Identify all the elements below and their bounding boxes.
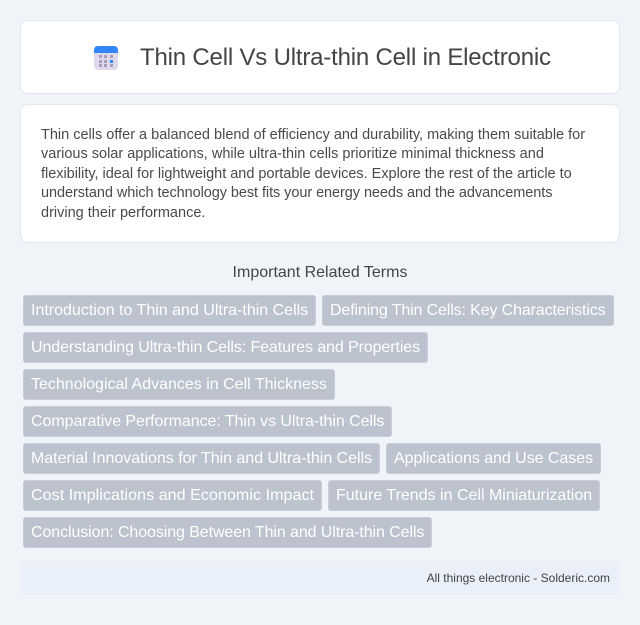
header card [20,20,620,94]
footer bar [20,561,620,595]
tag list: Cost Implications and Economic Impact [31,487,314,504]
intro text [41,127,585,221]
intro text: understand which technology best fits your energy needs and the advancements [41,185,552,201]
tag list: Introduction to Thin and Ultra-thin Cells [31,302,308,319]
tag list: Technological Advances in Cell Thickness [31,376,327,393]
intro text: Thin cells offer a balanced blend of efficiency and durability, making them suitable for [41,127,585,143]
intro text: various solar applications, while ultra-thin cells prioritize minimal thickness and [41,146,544,162]
tag list: Future Trends in Cell Miniaturization [336,487,592,504]
tag list: Material Innovations for Thin and Ultra-thin Cells [31,450,372,467]
tag list: Applications and Use Cases [394,450,593,467]
icon: calendar [94,46,118,70]
intro panel [20,104,620,243]
intro text: flexibility, ideal for lightweight and portable devices. Explore the rest of the article to [41,166,572,182]
tag list: Defining Thin Cells: Key Characteristics [330,302,606,319]
footer text: All things electronic - Solderic.com [427,571,610,585]
intro text: driving their performance. [41,205,205,221]
tag list: Conclusion: Choosing Between Thin and Ultra-thin Cells [31,524,424,541]
title: Thin Cell Vs Ultra-thin Cell in Electronic [140,44,551,71]
heading: related terms: Important Related Terms [233,264,407,281]
tag list: Comparative Performance: Thin vs Ultra-thin Cells [31,413,384,430]
tag list [23,295,614,548]
tag list: Understanding Ultra-thin Cells: Features and Properties [31,339,420,356]
